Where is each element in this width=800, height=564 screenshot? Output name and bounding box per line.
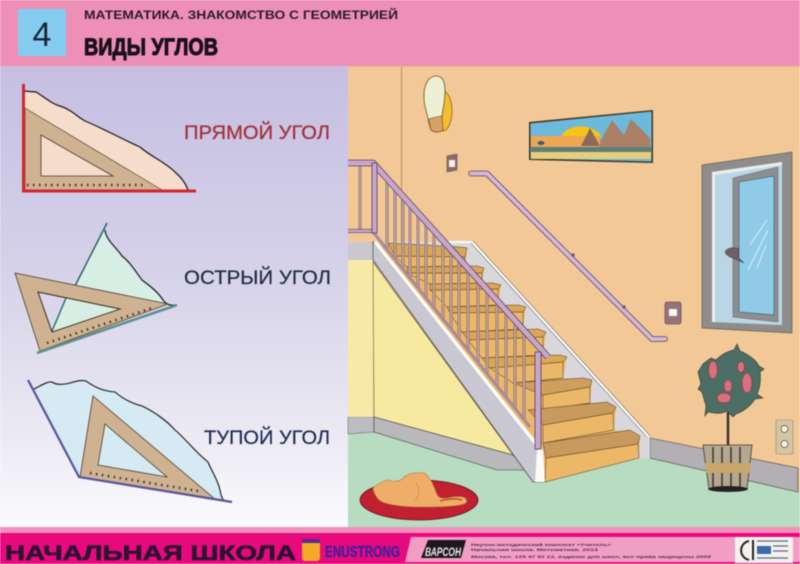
lesson number badge: 4 [33,16,51,54]
framed picture of pyramids [529,110,653,163]
right angle diagram [24,84,196,191]
panel: room scene [348,66,800,527]
staircase railing [348,163,548,449]
rose blossoms [708,361,752,403]
obtuse angle diagram [28,380,232,502]
publisher name: ENUSTRONG [325,544,400,561]
imprint text: Научно-методический комплект «Учитель» [471,542,612,547]
partner logo [735,537,793,563]
wall switch [665,302,681,324]
left yellow wall [348,242,373,260]
flower pot [703,445,752,492]
panel: angle types [0,66,348,527]
label: acute angle: ОСТРЫЙ УГОЛ [184,267,331,289]
lesson number badge [18,9,66,56]
publisher icon [302,539,320,561]
series subtitle: МАТЕМАТИКА. ЗНАКОМСТВО С ГЕОМЕТРИЕЙ [84,9,398,22]
imprint text [471,542,711,559]
wall handrail [471,174,665,339]
header band [0,0,800,66]
wall lamp [424,76,452,132]
staircase [373,242,650,482]
wall outlet [776,420,793,454]
light switch [447,154,457,172]
stair treads [388,243,640,458]
imprint logo [421,540,466,559]
label: right angle: ПРЯМОЙ УГОЛ [184,122,330,144]
acute angle diagram [15,223,177,353]
imprint panel [405,537,800,562]
stair risers [395,256,639,482]
right wall stringer [472,242,649,437]
window handle [725,248,744,263]
potted rose plant [698,344,764,492]
left stringer [373,242,545,482]
wall [348,66,800,506]
footer band [0,527,800,564]
imprint logo: ВАРСОН [425,545,461,559]
under-stair baseboard [374,417,527,470]
sleeping cat [373,473,467,507]
imprint text: Начальная школа. Математика. 2013 [471,547,599,552]
red rug [360,480,478,520]
imprint text: Москва, тел. 125 47 92 13, издание для школ, все права защищены 2009 [471,555,711,559]
label: obtuse angle: ТУПОЙ УГОЛ [204,427,330,449]
main title: ВИДЫ УГЛОВ [84,34,218,61]
floor [348,432,800,527]
window [702,152,792,333]
plant crown [698,344,764,417]
